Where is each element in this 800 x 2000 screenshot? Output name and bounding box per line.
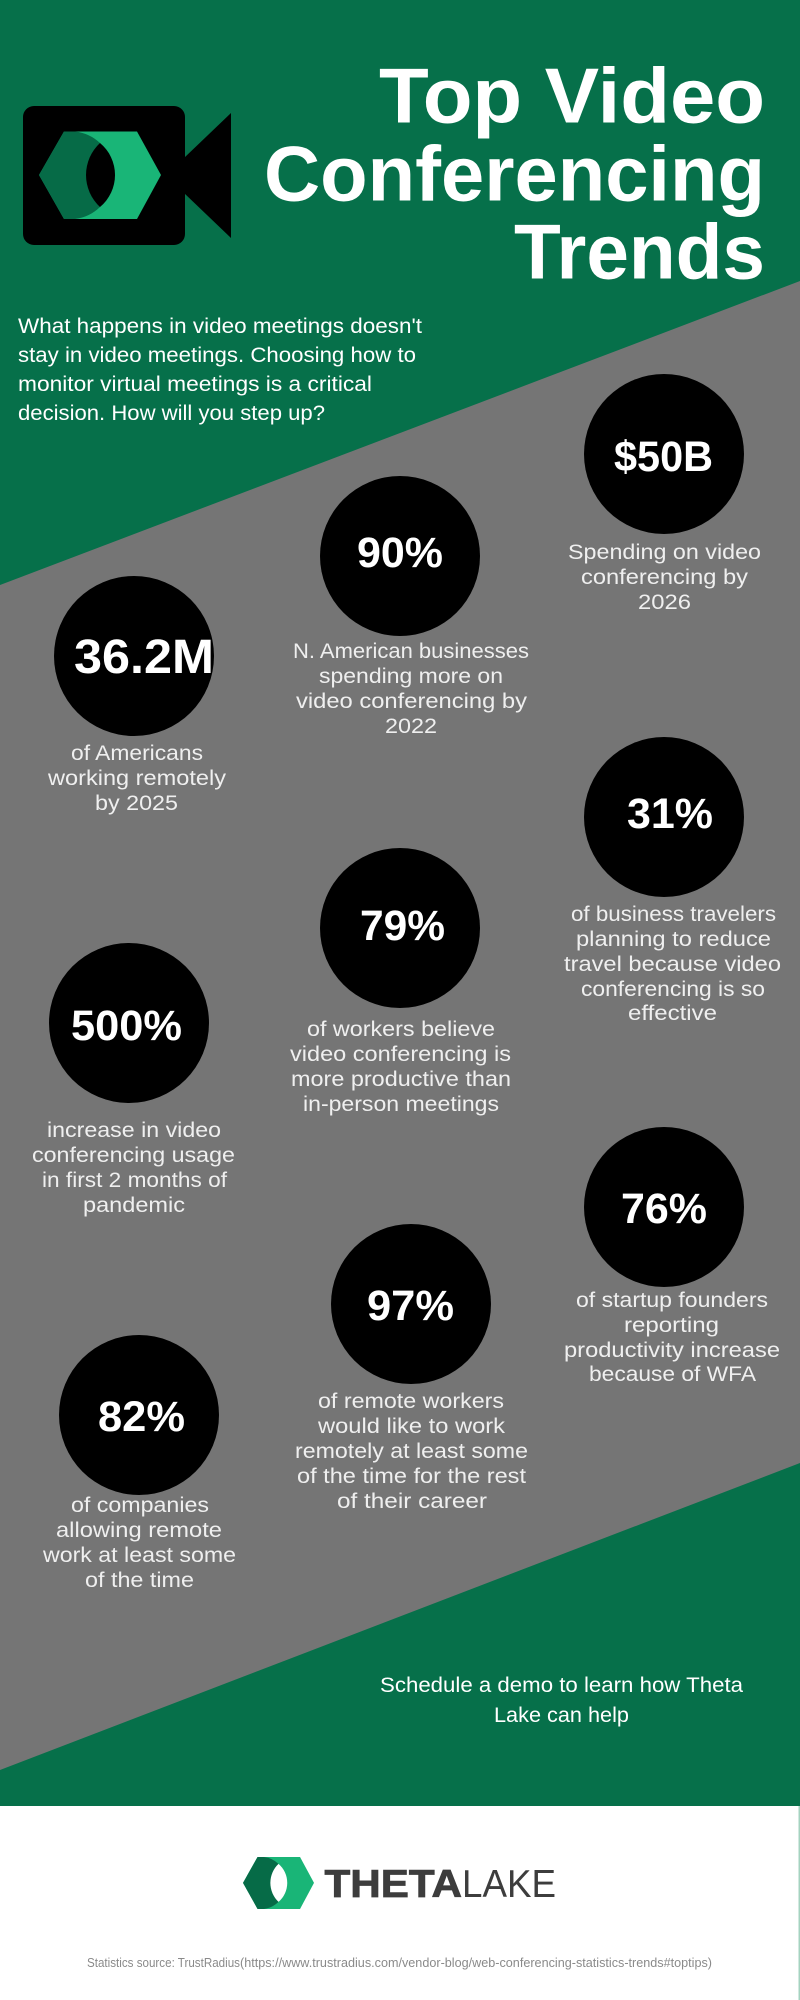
call to action text xyxy=(380,1674,743,1727)
caption: spending more on xyxy=(319,665,503,688)
circle xyxy=(320,848,480,1008)
caption: effective xyxy=(628,1002,717,1025)
circle xyxy=(49,943,209,1103)
number: 90% xyxy=(357,529,443,577)
caption xyxy=(568,541,761,614)
caption: of business travelers xyxy=(571,903,776,926)
stat: 97% xyxy=(295,1224,528,1513)
caption: would like to work xyxy=(317,1415,506,1438)
call to action text: Lake can help xyxy=(494,1704,629,1727)
intro text xyxy=(18,315,422,425)
caption: working remotely xyxy=(47,767,227,790)
wordmark xyxy=(324,1863,556,1906)
source note: (https://www.trustradius.com/vendor-blog/web-conferencing-statistics-trends#toptips) xyxy=(240,1955,712,1970)
caption xyxy=(564,1289,780,1386)
number: 79% xyxy=(360,902,445,950)
caption: 2026 xyxy=(638,591,691,614)
number: 82% xyxy=(98,1393,185,1441)
circle xyxy=(320,476,480,636)
caption: allowing remote xyxy=(56,1519,222,1542)
caption: conferencing is so xyxy=(581,978,765,1001)
caption: by 2025 xyxy=(95,792,178,815)
intro text: stay in video meetings. Choosing how to xyxy=(18,344,416,367)
panel: green header xyxy=(0,0,800,585)
caption: reporting xyxy=(624,1314,719,1337)
title xyxy=(264,52,765,296)
caption: pandemic xyxy=(83,1194,185,1217)
caption: more productive than xyxy=(291,1068,511,1091)
caption: productivity increase xyxy=(564,1339,780,1362)
caption: N. American businesses xyxy=(293,640,529,663)
caption xyxy=(32,1119,235,1217)
caption: of companies xyxy=(71,1494,209,1517)
icon: hexagon mark xyxy=(243,1857,314,1909)
caption xyxy=(47,742,227,815)
logo: Theta Lake xyxy=(243,1857,556,1909)
circle xyxy=(584,1127,744,1287)
number: 97% xyxy=(367,1282,454,1330)
number: 36.2M xyxy=(74,631,214,684)
call to action text: Schedule a demo to learn how Theta xyxy=(380,1674,743,1697)
caption xyxy=(293,640,529,738)
stat: 76% xyxy=(564,1127,780,1386)
caption xyxy=(42,1494,236,1592)
caption: of the time xyxy=(85,1569,194,1592)
icon: video camera with hexagon logo xyxy=(23,106,231,245)
caption: of Americans xyxy=(71,742,203,765)
caption: increase in video xyxy=(47,1119,221,1142)
circle xyxy=(584,374,744,534)
caption: remotely at least some xyxy=(295,1440,528,1463)
panel: green call-to-action xyxy=(0,1463,800,1806)
caption: of the time for the rest xyxy=(297,1465,526,1488)
caption: of their career xyxy=(337,1490,487,1513)
stat: 90% xyxy=(293,476,529,738)
number: 500% xyxy=(71,1002,182,1050)
caption: in-person meetings xyxy=(303,1093,499,1116)
number: 76% xyxy=(621,1185,707,1233)
title: Trends xyxy=(514,208,765,296)
stat: 31% xyxy=(564,737,781,1025)
intro text: What happens in video meetings doesn't xyxy=(18,315,422,338)
caption: of remote workers xyxy=(318,1390,504,1413)
stat: 82% xyxy=(42,1335,236,1592)
circle xyxy=(584,737,744,897)
caption: video conferencing is xyxy=(290,1043,511,1066)
wordmark: LAKE xyxy=(462,1863,556,1906)
source note: Statistics source: TrustRadius xyxy=(87,1955,240,1970)
caption: planning to reduce xyxy=(576,928,771,951)
caption: conferencing by xyxy=(581,566,749,589)
stat: $50B xyxy=(568,374,761,614)
caption: video conferencing by xyxy=(296,690,528,713)
stat: 79% xyxy=(290,848,511,1116)
caption xyxy=(290,1018,511,1116)
stat: 36.2M xyxy=(47,576,227,815)
intro text: decision. How will you step up? xyxy=(18,402,325,425)
caption: of workers believe xyxy=(307,1018,495,1041)
panel: grey diagonal band xyxy=(0,250,800,1790)
caption: because of WFA xyxy=(589,1363,756,1386)
caption: conferencing usage xyxy=(32,1144,235,1167)
intro text: monitor virtual meetings is a critical xyxy=(18,373,372,396)
caption xyxy=(295,1390,528,1513)
caption: of startup founders xyxy=(576,1289,768,1312)
circle xyxy=(59,1335,219,1495)
caption: travel because video xyxy=(564,953,781,976)
caption: 2022 xyxy=(385,715,437,738)
number: $50B xyxy=(614,433,713,481)
wordmark: THETA xyxy=(324,1863,462,1906)
title: Conferencing xyxy=(264,130,765,218)
circle xyxy=(331,1224,491,1384)
caption: in first 2 months of xyxy=(42,1169,227,1192)
caption xyxy=(564,903,781,1025)
caption: Spending on video xyxy=(568,541,761,564)
number: 31% xyxy=(627,790,713,838)
caption: work at least some xyxy=(42,1544,236,1567)
circle xyxy=(54,576,214,736)
title: Top Video xyxy=(379,52,765,140)
stat: 500% xyxy=(32,943,235,1217)
